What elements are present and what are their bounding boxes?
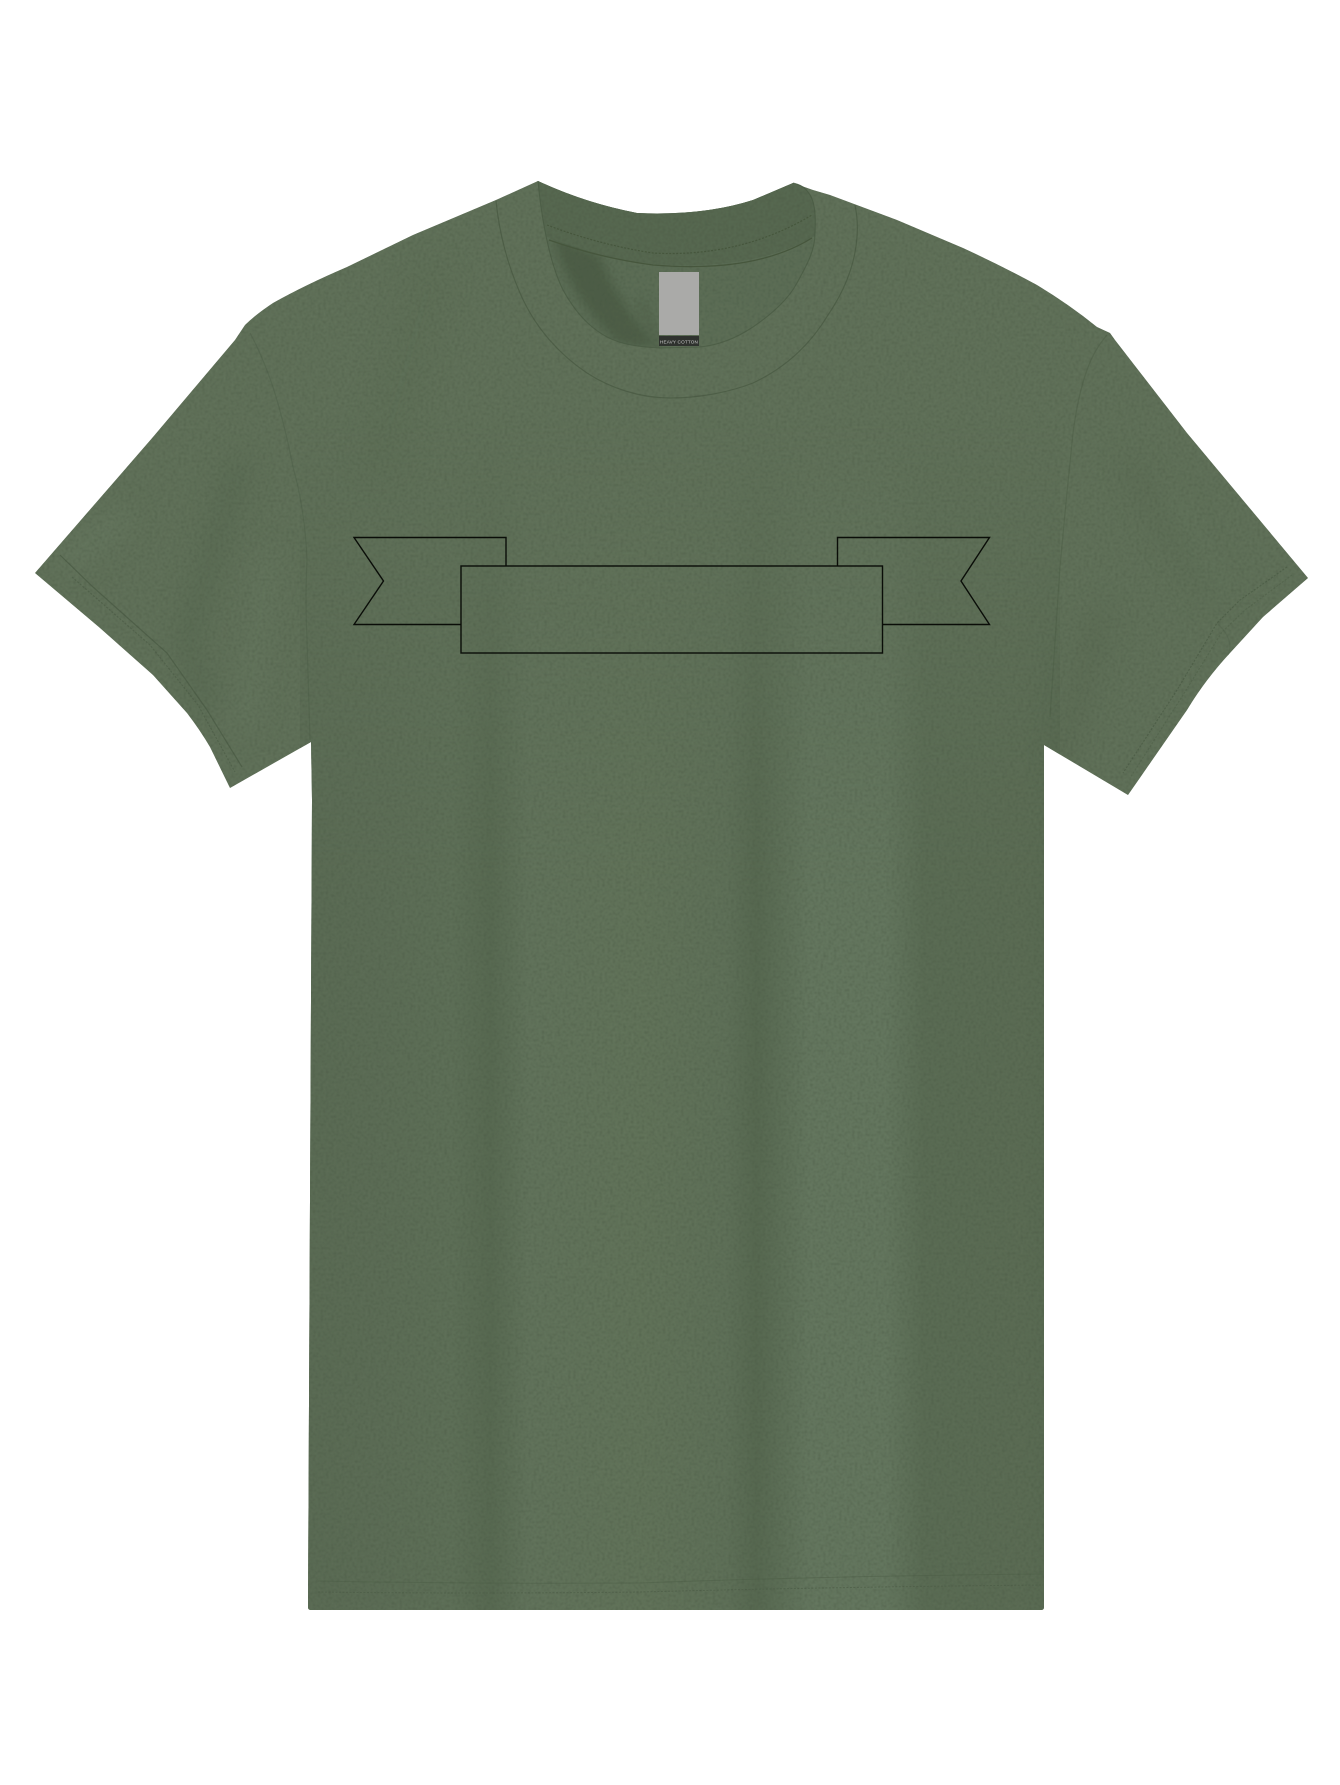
inside of the neck	[538, 181, 814, 348]
collar inner edge	[538, 181, 815, 348]
ribbon left tail	[354, 538, 506, 624]
bottom hem stitching	[318, 1574, 1043, 1593]
label: dark strip	[659, 336, 699, 346]
sleeve shading	[1052, 750, 1072, 762]
back collar band	[538, 181, 802, 214]
back collar stitching	[547, 215, 812, 267]
ribbon banner outline	[354, 538, 990, 653]
label: silver patch	[659, 272, 699, 335]
ribbon front panel	[461, 566, 882, 653]
label: small text: HEAVY COTTON	[660, 340, 698, 344]
collar outer seam	[496, 201, 857, 398]
left sleeve seam and hem	[60, 333, 310, 772]
right sleeve seam and hem	[1050, 335, 1292, 778]
inner neck shadow	[556, 242, 651, 346]
t-shirt mockup with ribbon	[35, 181, 1308, 1610]
neck label	[659, 272, 699, 346]
ribbon right tail	[838, 538, 990, 624]
